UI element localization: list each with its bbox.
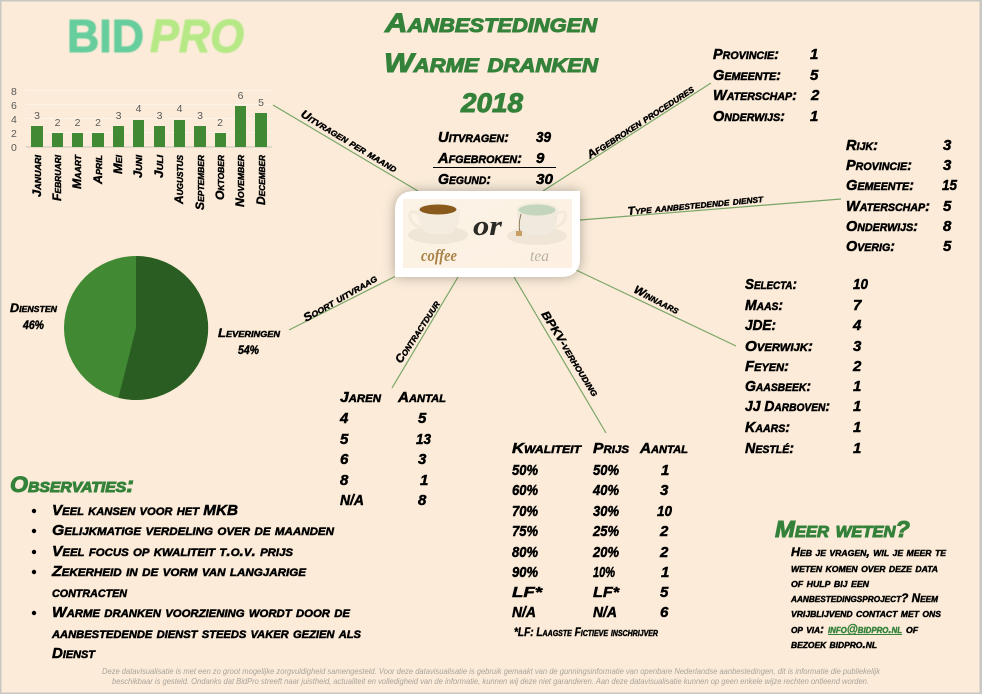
contact text: op via: <box>791 624 824 636</box>
table: bpkv-verhouding: LF* <box>593 584 620 601</box>
list: afgebroken procedures: Waterschap: <box>713 87 797 104</box>
list: winnaars: 1 <box>853 440 861 457</box>
bullet list: Veel focus op kwaliteit t.o.v. prijs <box>52 543 294 560</box>
list: winnaars: Nestlé: <box>745 440 794 457</box>
table: contractduur: Jaren <box>340 389 382 406</box>
panel: observaties <box>10 472 362 662</box>
table: contractduur: 4 <box>339 410 349 427</box>
contact text: Heb je vragen, wil je meer te <box>791 547 947 559</box>
arrow: soort uitvraag <box>289 273 396 330</box>
totals: uitvragen, afgebroken, gegund: 9 <box>536 150 545 167</box>
table: bpkv-verhouding: 5 <box>660 584 669 601</box>
arrow: soort uitvraag: Soort uitvraag <box>302 273 379 325</box>
bar chart: uitvragen per maand: 6 <box>11 100 17 112</box>
table: contractduur: 6 <box>340 451 349 468</box>
table: bpkv-verhouding: Aantal <box>639 440 688 457</box>
list: type aanbestedende dienst: Provincie: <box>846 157 912 174</box>
bar chart: uitvragen per maand <box>11 86 272 210</box>
table: bpkv-verhouding: Prijs <box>593 440 630 457</box>
disclaimer: Deze datavisualisatie is met een zo groot mogelijke zorgvuldigheid samengesteld. Voor deze datavisualisatie is gebruik gemaakt van de gunningsinformatie van openbare Nederlandse aanbestedingen, dit is informatie die publiekelijk <box>102 666 881 676</box>
list: type aanbestedende dienst: 15 <box>942 177 958 194</box>
bar chart: uitvragen per maand: 8 <box>11 86 17 98</box>
arrow: uitvragen per maand: Uitvragen per maand <box>298 108 399 175</box>
table: bpkv-verhouding: *LF: Laagste Fictieve inschrijver <box>514 627 658 639</box>
table: contractduur: Aantal <box>397 389 446 406</box>
table: contractduur: 1 <box>420 472 428 489</box>
table: bpkv-verhouding: 2 <box>659 544 669 561</box>
list: type aanbestedende dienst <box>846 137 958 255</box>
bar chart: uitvragen per maand: 6 <box>238 90 244 102</box>
bar chart: uitvragen per maand: Januari <box>32 154 44 197</box>
icon: tea cup: tea <box>530 248 549 265</box>
central image: coffee or tea <box>395 191 580 277</box>
table: bpkv-verhouding: 20% <box>592 544 619 561</box>
table: bpkv-verhouding: 80% <box>512 544 538 561</box>
list: winnaars: JDE: <box>745 317 776 334</box>
arrow: bpkv-verhouding: BPKV-verhouding <box>538 309 601 399</box>
pie chart: soort uitvraag <box>10 256 280 400</box>
totals: uitvragen, afgebroken, gegund: Gegund: <box>438 171 491 188</box>
icon: tea cup <box>507 202 567 265</box>
table: contractduur: N/A <box>340 492 364 509</box>
bar chart: uitvragen per maand: November <box>235 155 247 207</box>
bar chart: uitvragen per maand: December <box>256 155 268 205</box>
list: winnaars: 1 <box>853 398 861 415</box>
arrow: contractduur: Contractduur <box>393 299 443 366</box>
bullet list: Zekerheid in de vorm van langjarige <box>51 563 307 580</box>
list: winnaars: JJ Darboven: <box>745 398 830 415</box>
table: bpkv-verhouding: 30% <box>593 503 619 520</box>
title <box>384 8 599 118</box>
heading: observaties: Observaties: <box>10 472 134 497</box>
totals: uitvragen, afgebroken, gegund: 30 <box>536 171 554 188</box>
table: bpkv-verhouding: 2 <box>659 523 669 540</box>
arrow: winnaars: Winnaars <box>632 284 681 317</box>
bar chart: uitvragen per maand: Juli <box>154 154 166 178</box>
list: afgebroken procedures <box>713 46 820 125</box>
list: type aanbestedende dienst: Gemeente: <box>846 177 914 194</box>
list: afgebroken procedures: Onderwijs: <box>713 108 785 125</box>
arrow: uitvragen per maand <box>273 105 418 191</box>
bar chart: uitvragen per maand: 4 <box>177 103 183 115</box>
icon: coffee cup: coffee <box>421 246 457 265</box>
contact text: weten komen over deze data <box>791 563 938 575</box>
arrow: afgebroken procedures: Afgebroken procedures <box>584 83 697 162</box>
arrow: type aanbestedende dienst: Type aanbestedende dienst <box>627 193 765 218</box>
bar chart: uitvragen per maand: 0 <box>11 142 17 154</box>
contact text: of hulp bij een <box>791 578 869 590</box>
table: bpkv-verhouding: LF* <box>512 584 543 601</box>
table: contractduur: 3 <box>418 451 427 468</box>
list: afgebroken procedures: 1 <box>810 46 818 63</box>
table: contractduur: 13 <box>416 431 432 448</box>
bullet list: contracten <box>52 584 128 601</box>
contact text: of <box>906 624 919 636</box>
table: bpkv-verhouding: 1 <box>661 462 669 479</box>
bar chart: uitvragen per maand: 3 <box>116 110 122 122</box>
list: type aanbestedende dienst: 5 <box>943 198 952 215</box>
contact text: info@bidpro.nl <box>828 624 902 636</box>
list: afgebroken procedures: Gemeente: <box>713 67 781 84</box>
table: bpkv-verhouding: 75% <box>512 523 538 540</box>
bar chart: uitvragen per maand: September <box>195 155 207 210</box>
table: contractduur: 5 <box>340 431 349 448</box>
bullet list: Gelijkmatige verdeling over de maanden <box>52 522 335 539</box>
table: bpkv-verhouding <box>512 440 688 639</box>
logo: BidPro: BID <box>67 10 144 62</box>
totals: uitvragen, afgebroken, gegund: 39 <box>536 129 552 146</box>
bar chart: uitvragen per maand: Oktober <box>215 155 227 200</box>
arrow: contractduur <box>392 277 458 388</box>
contact text <box>790 547 947 651</box>
table: bpkv-verhouding: 90% <box>512 564 538 581</box>
bar chart: uitvragen per maand: Juni <box>133 154 145 178</box>
list: winnaars <box>745 276 869 457</box>
list: type aanbestedende dienst: 5 <box>943 238 952 255</box>
pie chart: soort uitvraag: Diensten <box>10 303 57 315</box>
list: winnaars: Overwijk: <box>745 338 813 355</box>
bullet list: Warme dranken voorziening wordt door de <box>52 604 351 621</box>
list: winnaars: 7 <box>853 297 862 314</box>
logo: BidPro <box>67 10 244 62</box>
list: winnaars: 1 <box>853 419 861 436</box>
table: bpkv-verhouding: 60% <box>512 482 538 499</box>
bar chart: uitvragen per maand: 3 <box>197 110 203 122</box>
totals: uitvragen, afgebroken, gegund: Afgebroken: <box>437 150 522 167</box>
table: bpkv-verhouding: 6 <box>660 604 669 621</box>
bar chart: uitvragen per maand: Augustus <box>174 154 186 205</box>
icon: coffee cup <box>408 202 468 265</box>
list: type aanbestedende dienst: Overig: <box>846 238 895 255</box>
list: type aanbestedende dienst: Waterschap: <box>846 198 930 215</box>
list: afgebroken procedures: 5 <box>810 67 819 84</box>
list: winnaars: Selecta: <box>745 276 797 293</box>
bar chart: uitvragen per maand: April <box>93 155 105 185</box>
contact text: vrijblijvend contact met ons <box>791 608 942 620</box>
table: bpkv-verhouding: 25% <box>592 523 619 540</box>
disclaimer: beschikbaar is gesteld. Ondanks dat BidPro streeft naar juistheid, actualiteit en volledigheid van de informatie, kunnen wij deze niet garanderen. Aan deze datavisualisatie kunnen op geen enkele wijze rechten ontleend worden. <box>112 676 869 686</box>
arrow: type aanbestedende dienst <box>580 193 841 220</box>
pie chart: soort uitvraag: 46% <box>22 320 44 332</box>
bar chart: uitvragen per maand: 2 <box>95 117 101 129</box>
list: winnaars: Kaars: <box>745 419 790 436</box>
logo: BidPro: PRO <box>150 10 244 62</box>
bar chart: uitvragen per maand: 4 <box>136 103 142 115</box>
bar chart: uitvragen per maand: 3 <box>34 110 40 122</box>
list: winnaars: 3 <box>853 338 862 355</box>
title: Warme dranken <box>384 48 599 78</box>
or: or <box>473 210 503 242</box>
bar chart: uitvragen per maand: 5 <box>258 97 264 109</box>
list: afgebroken procedures: Provincie: <box>713 46 779 63</box>
heading: meer weten: Meer weten? <box>775 516 910 542</box>
table: contractduur: 8 <box>340 472 349 489</box>
bar chart: uitvragen per maand: 4 <box>11 114 17 126</box>
bullet list <box>32 502 362 662</box>
title: 2018 <box>460 88 523 118</box>
table: bpkv-verhouding: Kwaliteit <box>512 440 582 457</box>
table: contractduur <box>339 389 446 509</box>
bar chart: uitvragen per maand: Februari <box>52 154 64 201</box>
list: type aanbestedende dienst: Rijk: <box>846 137 878 154</box>
arrow: afgebroken procedures <box>543 83 711 191</box>
list: type aanbestedende dienst: 3 <box>943 137 952 154</box>
list: winnaars: Maas: <box>745 297 783 314</box>
bar chart: uitvragen per maand: 2 <box>217 117 223 129</box>
table: bpkv-verhouding: N/A <box>593 604 617 621</box>
arrow: winnaars <box>576 270 736 346</box>
title: Aanbestedingen <box>384 8 598 38</box>
list: winnaars: 10 <box>853 276 869 293</box>
list: winnaars: 2 <box>852 358 862 375</box>
table: bpkv-verhouding: 1 <box>661 564 669 581</box>
table: bpkv-verhouding: 70% <box>512 503 538 520</box>
bar chart: uitvragen per maand: Mei <box>113 154 125 174</box>
list: winnaars: 1 <box>853 378 861 395</box>
table: bpkv-verhouding: 10 <box>657 503 673 520</box>
list: afgebroken procedures: 2 <box>810 87 820 104</box>
bullet list: Dienst <box>52 645 96 662</box>
list: winnaars: 4 <box>852 317 862 334</box>
table: contractduur: 5 <box>418 410 427 427</box>
list: afgebroken procedures: 1 <box>810 108 818 125</box>
contact text: aanbestedingsproject? Neem <box>790 593 938 605</box>
disclaimer <box>102 666 881 686</box>
bullet list: aanbestedende dienst steeds vaker gezien als <box>51 625 362 642</box>
table: bpkv-verhouding: 50% <box>512 462 538 479</box>
panel: meer weten <box>775 516 947 651</box>
bar chart: uitvragen per maand: Maart <box>72 154 84 189</box>
pie chart: soort uitvraag: Leveringen <box>218 328 280 340</box>
arrow: bpkv-verhouding <box>514 277 606 433</box>
bullet list: Veel kansen voor het MKB <box>52 502 238 519</box>
contact text: bezoek bidpro.nl <box>791 639 877 651</box>
list: type aanbestedende dienst: 8 <box>943 218 952 235</box>
totals: uitvragen, afgebroken, gegund <box>433 129 556 188</box>
bar chart: uitvragen per maand: 2 <box>11 128 17 140</box>
bar chart: uitvragen per maand: 2 <box>55 117 61 129</box>
table: bpkv-verhouding: 3 <box>660 482 669 499</box>
list: type aanbestedende dienst: Onderwijs: <box>846 218 918 235</box>
bar chart: uitvragen per maand: 3 <box>157 110 163 122</box>
pie chart: soort uitvraag: 54% <box>238 345 259 357</box>
list: winnaars: Feyen: <box>745 358 789 375</box>
table: contractduur: 8 <box>418 492 427 509</box>
table: bpkv-verhouding: 10% <box>593 564 615 581</box>
bar chart: uitvragen per maand: 2 <box>75 117 81 129</box>
totals: uitvragen, afgebroken, gegund: Uitvragen: <box>438 129 509 146</box>
table: bpkv-verhouding: 40% <box>592 482 619 499</box>
table: bpkv-verhouding: 50% <box>593 462 619 479</box>
table: bpkv-verhouding: N/A <box>512 604 536 621</box>
list: type aanbestedende dienst: 3 <box>943 157 952 174</box>
list: winnaars: Gaasbeek: <box>745 378 811 395</box>
